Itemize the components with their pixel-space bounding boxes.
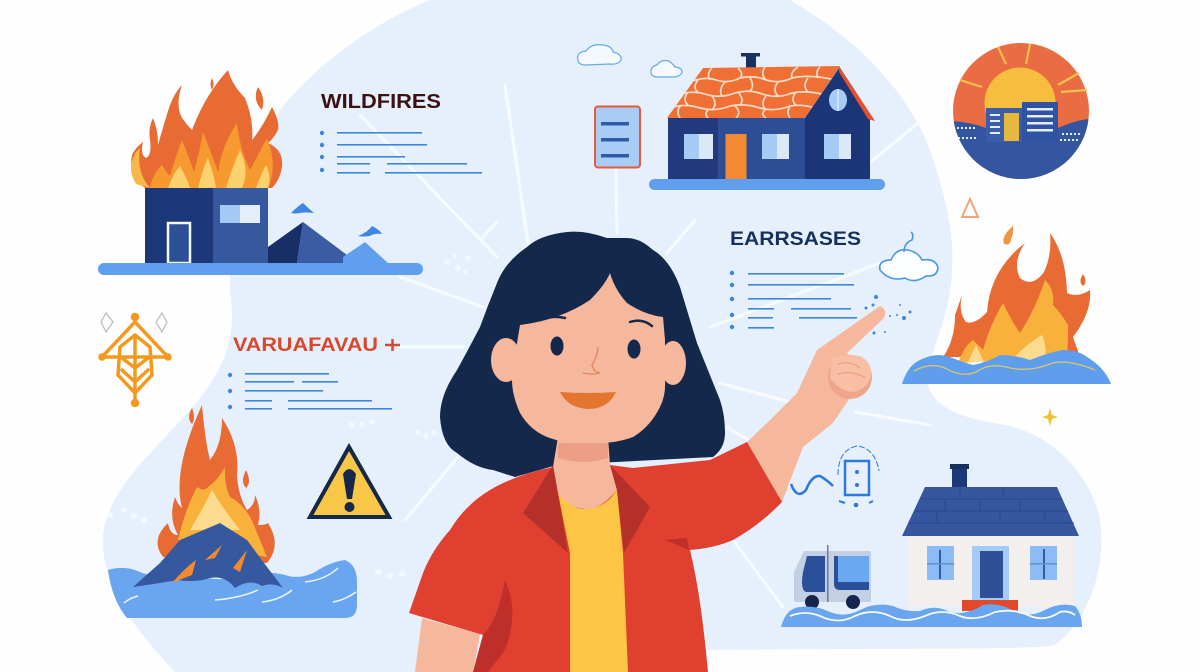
flood house	[902, 464, 1079, 611]
icon: orange leaf emblem	[100, 314, 170, 406]
eyes	[550, 336, 640, 358]
flame	[943, 233, 1090, 363]
icon: sensor device and wave	[791, 446, 879, 507]
ground bar	[98, 263, 423, 275]
panel: flame on water right	[902, 199, 1111, 384]
raised arm	[747, 306, 885, 502]
icon: document card	[595, 106, 640, 168]
water	[902, 350, 1111, 384]
icon: clouds	[578, 45, 682, 77]
droplet	[1003, 226, 1013, 244]
icon: plus sign	[385, 339, 400, 351]
yellow top	[558, 490, 628, 672]
shirt	[409, 442, 782, 672]
face	[512, 273, 665, 443]
icon: gold sparkle	[1042, 408, 1058, 426]
roof	[667, 66, 840, 118]
triangle outline	[962, 199, 978, 217]
eyebrows	[541, 317, 652, 326]
flame	[158, 405, 275, 563]
icon: spark dots	[864, 295, 912, 334]
panel: house with cracked roof	[649, 53, 885, 190]
water	[108, 560, 357, 618]
bullet list: varuafavau	[228, 373, 392, 410]
ground bar	[649, 179, 885, 190]
collar	[523, 465, 650, 553]
mouth	[560, 392, 616, 409]
panel: fire on rock in water	[108, 405, 357, 618]
armpit shadow	[665, 538, 689, 550]
fist	[828, 355, 872, 399]
wave highlights	[124, 568, 356, 603]
flood water	[781, 604, 1082, 627]
rock	[133, 523, 283, 588]
flame on building	[131, 70, 282, 188]
heading: earrsases: EARRSASES	[730, 229, 861, 250]
bullet list: wildfires	[320, 131, 482, 174]
icon: cloud outline	[880, 232, 938, 281]
ears	[491, 338, 686, 385]
mountains	[268, 203, 388, 263]
hair	[440, 232, 725, 477]
embers	[172, 545, 247, 583]
nose	[583, 347, 600, 374]
panel: wildfires building	[98, 70, 423, 275]
sleeve shadow	[473, 580, 512, 672]
windows and door	[684, 134, 851, 179]
icon: small gems	[101, 313, 167, 332]
panel: house and truck in flood	[781, 464, 1082, 627]
walls	[668, 66, 875, 179]
burning building	[145, 188, 268, 263]
heading: wildfires: WILDFIRES	[321, 91, 441, 113]
bullet list: earrsases	[730, 271, 857, 329]
icon: warning triangle	[310, 447, 389, 517]
truck	[794, 545, 871, 609]
icon: sun over city	[953, 43, 1089, 179]
left arm	[415, 618, 480, 672]
neck	[553, 437, 618, 509]
heading: varuafavau: VARUAFAVAU	[233, 335, 378, 356]
character: woman pointing	[409, 232, 885, 672]
chimney	[741, 53, 760, 69]
